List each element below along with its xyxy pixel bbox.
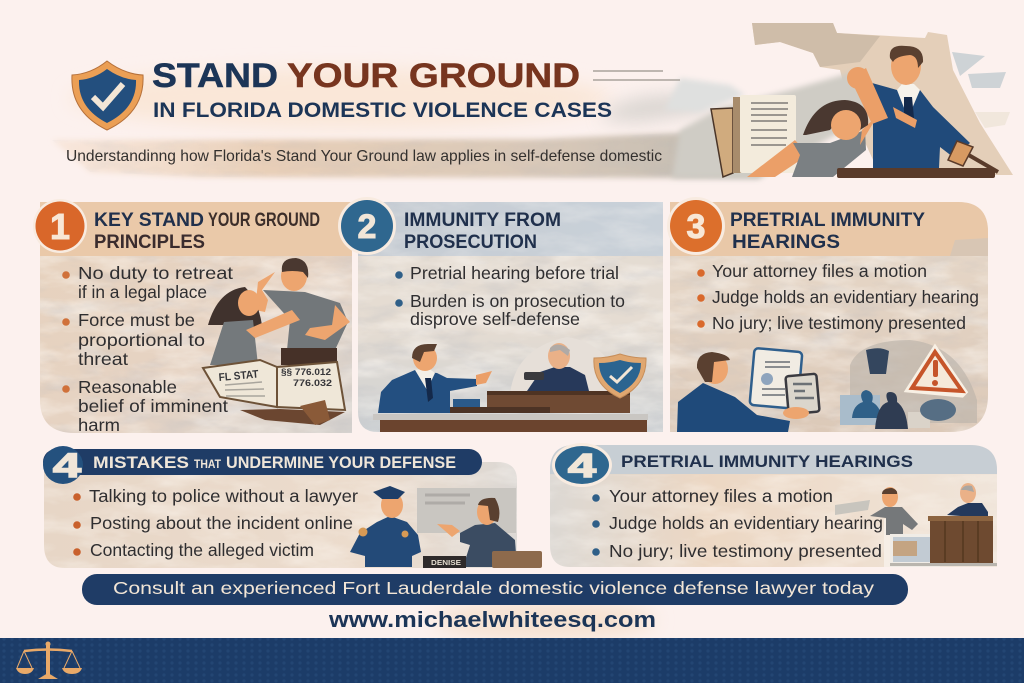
heading: IMMUNITY FROM [404, 210, 561, 231]
heading text [93, 453, 456, 472]
heading: YOUR GROUND [208, 210, 320, 231]
bullet list: disprove self-defense [410, 309, 580, 329]
number badge 2 [338, 197, 396, 255]
heading [404, 210, 561, 253]
hero illustration: Florida map, book, woman, attorney, gavel [665, 23, 1013, 178]
title decorative lines [593, 71, 680, 80]
map of Florida [752, 23, 1013, 175]
bullet list: Pretrial hearing before trial [410, 263, 619, 283]
desk [837, 168, 995, 178]
bullet list: Burden is on prosecution to [410, 291, 625, 311]
heading text: MISTAKES [93, 453, 189, 472]
illustration: arguing couple and statute book [203, 258, 350, 425]
bullet list: Reasonable [78, 377, 177, 397]
title [152, 57, 580, 95]
bullet list: Judge holds an evidentiary hearing [609, 513, 883, 533]
title: YOUR GROUND [287, 57, 580, 95]
title: STAND [152, 57, 278, 95]
bullet list [395, 263, 625, 329]
bullet list: if in a legal place [78, 282, 207, 302]
bullet list: threat [78, 349, 128, 369]
number badge 1 [33, 199, 87, 253]
gavel [960, 150, 998, 172]
heading: PRETRIAL IMMUNITY [730, 210, 925, 231]
open book [711, 108, 733, 177]
heading [730, 210, 925, 253]
bullet list [73, 486, 358, 560]
statute text: FL STAT [218, 369, 259, 384]
bullet list: Force must be [78, 310, 195, 330]
shield icon [72, 61, 143, 130]
icon: scales of justice [16, 642, 82, 679]
bullet list: Judge holds an evidentiary hearing [712, 287, 979, 307]
heading: HEARINGS [732, 232, 840, 253]
bullet list: belief of imminent [78, 396, 228, 416]
heading: KEY STAND [94, 210, 204, 231]
panel 3: pretrial immunity hearings [667, 197, 988, 432]
bullet list [62, 263, 233, 435]
call to action banner [82, 574, 908, 605]
bullet list: proportional to [78, 330, 205, 350]
number badge 4 [552, 443, 612, 487]
bullet list: Your attorney files a motion [609, 486, 833, 506]
number badge 3: 3 [687, 208, 705, 246]
number badge 2: 2 [358, 208, 376, 246]
heading: PRETRIAL IMMUNITY HEARINGS [621, 452, 913, 471]
attorney [872, 83, 970, 168]
banner text: Consult an experienced Fort Lauderdale domestic violence defense lawyer today [113, 578, 874, 598]
bullet list: No duty to retreat [78, 263, 233, 283]
panel 2: immunity from prosecution [338, 197, 663, 432]
dark heading bar [43, 449, 482, 475]
bullet list [697, 261, 979, 333]
bullet list [592, 486, 883, 561]
panel 1: key principles [33, 199, 352, 435]
bullet list: harm [78, 415, 120, 435]
statute numbers [281, 367, 332, 389]
number badge 4: 4 [568, 447, 597, 484]
heading text: THAT [194, 457, 222, 471]
panel 4: mistakes [43, 446, 542, 568]
number badge 3 [667, 197, 725, 255]
illustration: attorney with documents and warning sign [677, 340, 977, 432]
footer bar [0, 638, 1024, 683]
panel 5: pretrial immunity hearings [550, 443, 997, 567]
number badge 4: 4 [53, 447, 81, 485]
heading text: UNDERMINE YOUR DEFENSE [226, 453, 456, 472]
illustration: attorney, judge, shield [373, 337, 648, 432]
bullet list: No jury; live testimony presented [712, 313, 966, 333]
bullet list: Posting about the incident online [90, 513, 353, 533]
woman [747, 140, 808, 177]
illustration: witness and judge at the bench [835, 483, 997, 567]
intro text: Understandinng how Florida's Stand Your Ground law applies in self-defense domestic [66, 148, 662, 165]
website url: www.michaelwhiteesq.com [328, 607, 656, 632]
number badge 4 [43, 446, 83, 485]
bullet list: Talking to police without a lawyer [89, 486, 358, 506]
bullet list: Your attorney files a motion [712, 261, 927, 281]
subtitle heading: IN FLORIDA DOMESTIC VIOLENCE CASES [153, 99, 612, 122]
bullet list: No jury; live testimony presented [609, 541, 882, 561]
heading [94, 210, 320, 253]
illustration: police officer and attorney [350, 486, 542, 568]
statute numbers: 776.032 [293, 378, 332, 389]
heading: PRINCIPLES [94, 232, 205, 253]
number badge 1: 1 [50, 206, 70, 247]
desk nameplate: DENISE [431, 558, 461, 567]
statute numbers: §§ 776.012 [281, 367, 331, 378]
bullet list: Contacting the alleged victim [90, 540, 314, 560]
header background washes [52, 68, 762, 640]
heading: PROSECUTION [404, 232, 537, 253]
